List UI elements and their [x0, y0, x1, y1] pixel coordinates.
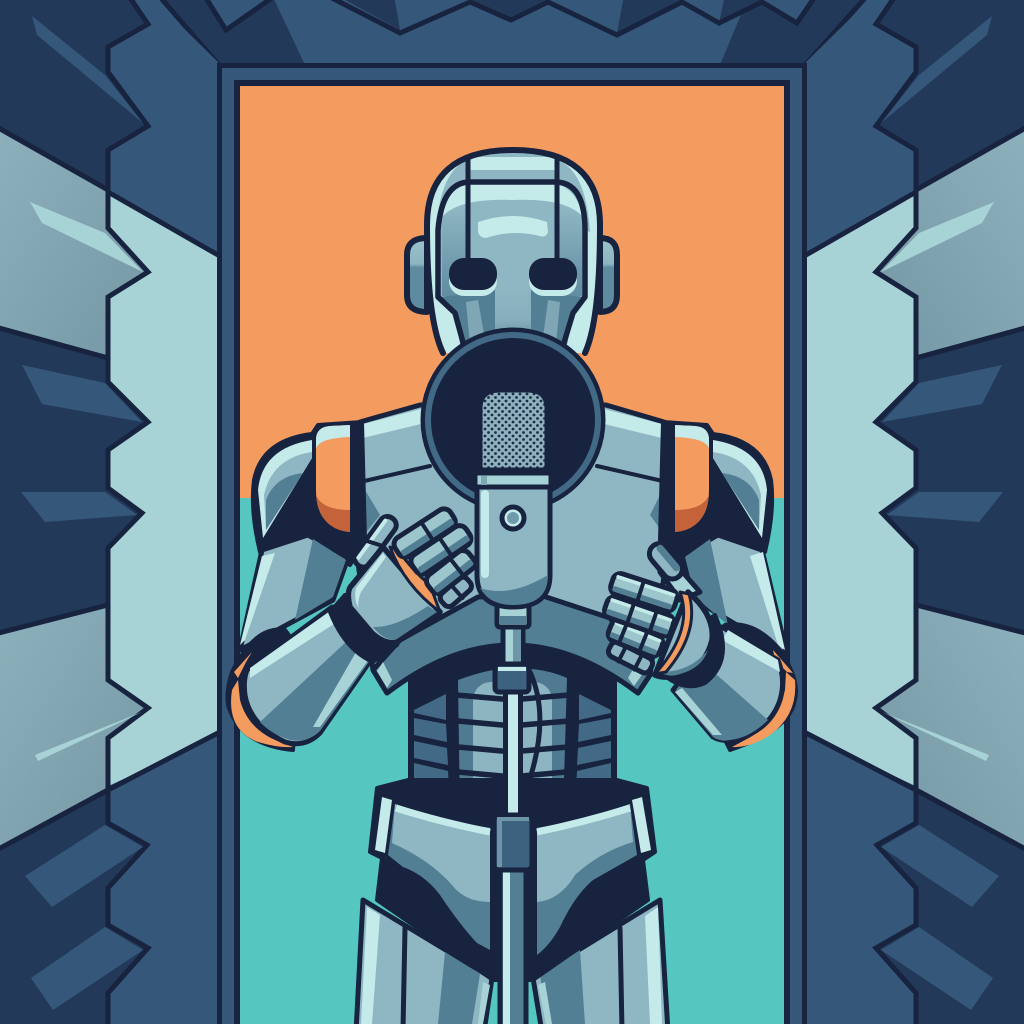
- ceiling acoustic foam: [160, 0, 866, 65]
- eyes: [449, 258, 577, 296]
- left hand: [348, 506, 478, 643]
- stand lower pole: [500, 868, 526, 1024]
- center ribs: [456, 668, 569, 815]
- left fingers: [391, 506, 478, 610]
- left leg: [356, 900, 492, 1024]
- right shoulder: [660, 422, 772, 565]
- pelvis: [370, 780, 655, 980]
- ear left: [407, 238, 427, 312]
- right leg: [533, 900, 668, 1024]
- robot head: [407, 150, 617, 355]
- mic collar: [475, 473, 551, 487]
- mic body: [477, 487, 550, 607]
- pop filter: [423, 330, 603, 510]
- torso chest armour: [352, 405, 672, 693]
- left shoulder: [253, 422, 365, 565]
- lower chest plate: [373, 595, 650, 693]
- side ribs: [414, 694, 611, 788]
- microphone and stand: [475, 390, 551, 1024]
- stand middle pole: [503, 690, 523, 818]
- right forearm with orange elbow: [673, 624, 796, 750]
- upper stand clamp: [495, 664, 529, 692]
- stand neck: [503, 625, 523, 667]
- abdomen: [408, 640, 617, 815]
- left thumb: [351, 513, 399, 570]
- right fingers: [602, 572, 679, 676]
- cable: [525, 672, 540, 793]
- right upper arm: [683, 535, 787, 655]
- left palm: [348, 547, 440, 643]
- left forearm with orange elbow: [228, 607, 373, 750]
- lower stand clamp: [494, 815, 532, 870]
- face shell: [427, 150, 600, 355]
- right thumb: [645, 540, 700, 600]
- right hand: [602, 540, 712, 677]
- right palm: [655, 592, 712, 677]
- door frame and booth window: [220, 66, 804, 1024]
- right wall foam panels: [806, 0, 1024, 1024]
- mic lens: [502, 507, 524, 529]
- right wrist: [665, 615, 723, 686]
- left wall foam panels: [0, 0, 218, 1024]
- left upper arm: [240, 535, 348, 650]
- mic grille: [480, 390, 547, 470]
- left wrist: [330, 595, 397, 662]
- ear right: [600, 238, 617, 312]
- mic bottom collar: [497, 605, 529, 627]
- robot: [228, 150, 796, 1024]
- shoulder orange pad: [316, 425, 350, 532]
